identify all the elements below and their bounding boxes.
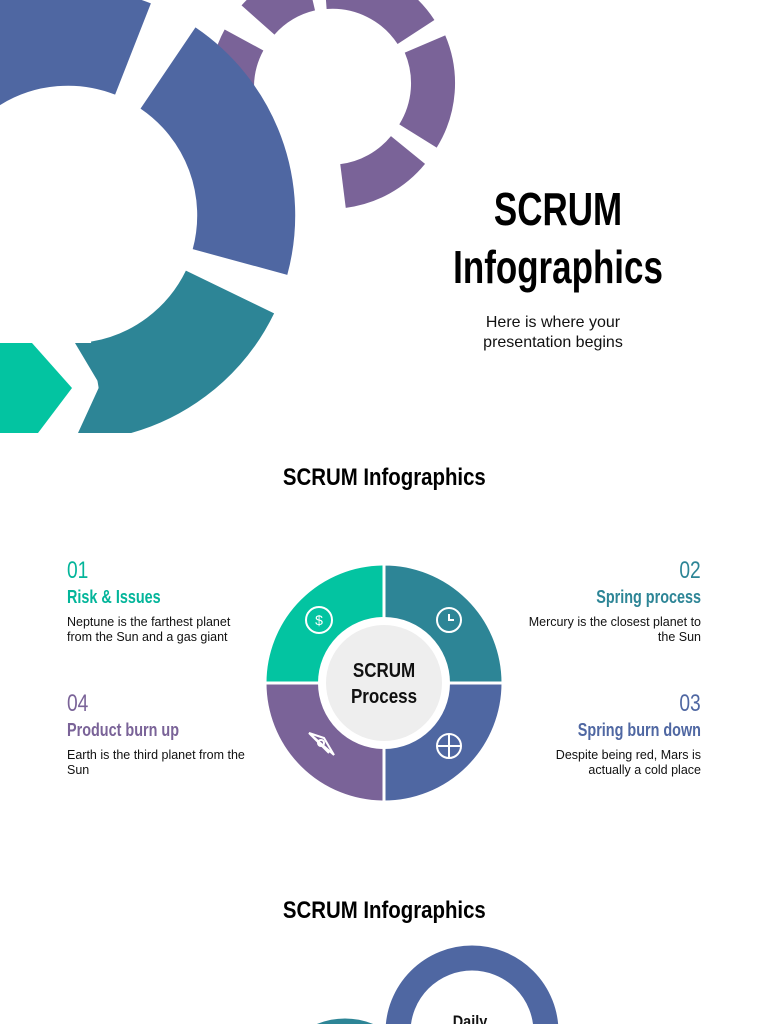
gear: big ring [0,37,246,390]
section 2 heading: SCRUM Infographics [283,464,485,491]
item 01: Risk & Issues [67,587,161,607]
item 04: Product burn up [67,720,179,740]
item 04: 04 [67,690,88,717]
icons [306,607,461,758]
donut chart: Process [351,685,417,707]
item 04: Earth is the third planet from the Sun [67,748,245,777]
item 01 [67,557,230,644]
item 02 [529,557,701,644]
subtitle: presentation begins [483,334,623,351]
section 3 heading: SCRUM Infographics [283,897,485,924]
subtitle: Here is where your [486,314,620,331]
item 02: 02 [680,557,701,584]
icons: $ [315,612,323,628]
item 03 [556,690,701,777]
item 01: Neptune is the farthest planet from the Sun and a gas giant [67,615,230,644]
title: SCRUM [494,183,622,235]
item 03: Spring burn down [578,720,701,740]
title: Infographics [453,241,663,293]
item 03: 03 [680,690,701,717]
item 02: Mercury is the closest planet to the Sun [529,615,701,644]
graphic: gears [0,0,456,433]
arrow tips [75,343,120,433]
title [453,183,663,293]
item 02: Spring process [596,587,701,607]
item 01: 01 [67,557,88,584]
subtitle [483,314,623,351]
item 03: Despite being red, Mars is actually a cold place [556,748,701,777]
bottom rings [317,946,558,1024]
donut chart [266,566,502,800]
donut chart: SCRUM [353,659,415,681]
gear: small purple [232,0,433,186]
item 04 [67,690,245,777]
